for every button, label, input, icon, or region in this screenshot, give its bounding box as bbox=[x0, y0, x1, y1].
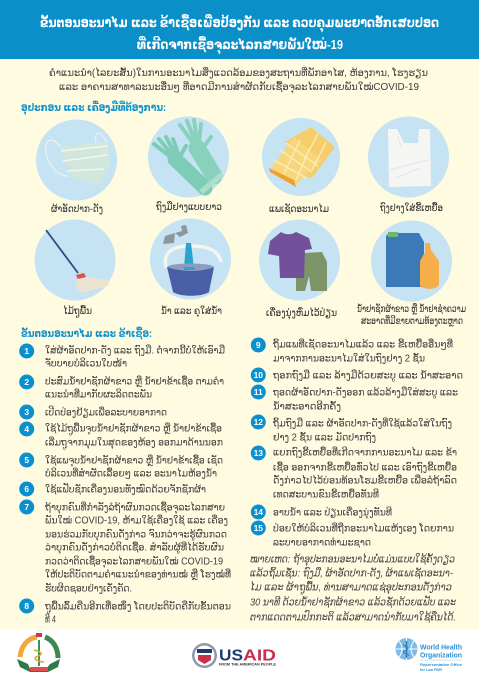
step 15 bbox=[251, 520, 454, 548]
step 8 bbox=[19, 598, 231, 626]
step 12: ຖິ້ມຖົງມື ແລະ ຜ້າອັດປາກ-ດັງທີ່ໃຊ້ແລ້ວໃສ່ໃນຖົງ bbox=[273, 416, 452, 430]
step 12: 12 bbox=[254, 417, 263, 427]
step 14: ອາບນ້ຳ ແລະ ປ່ຽນເຄື່ອງນຸ່ງທັນທີ bbox=[273, 505, 392, 520]
step 11: 11 bbox=[254, 387, 263, 397]
item: spare clothes: ເຄື່ອງນຸ່ງຫົ່ມໄວ້ປ່ຽນ bbox=[266, 307, 337, 320]
item: bleach and cleaning products bbox=[357, 220, 466, 327]
step 15: 15 bbox=[254, 523, 263, 533]
step 1: ຈັບບາຍບໍລິເວນໃບໜ້າ bbox=[45, 356, 127, 370]
step 9: ຖິ້ມແພທີ່ເຊັດອະນາໄມແລ້ວ ແລະ ຂີ້ເຫຍື້ອອື່ນໆທີ່ bbox=[273, 337, 453, 350]
step 7: ວ່າບຸກຄົນດັ່ງກ່າວບໍ່ຕິດເຊື້ອ. ສຳລັບຜູ້ທີ່ໄດ້ຮັບຜົນ bbox=[45, 540, 224, 554]
logo: World Health Organization: Representative Office bbox=[420, 663, 462, 667]
step 3: 3 bbox=[24, 407, 29, 417]
note: ໄມ ແລະ ຜ້າຖູພື້ນ, ທ່ານສາມາດແຊ່ອຸປະກອນດັ່ງກ່າວ bbox=[250, 580, 453, 594]
step 6: 6 bbox=[24, 484, 29, 494]
step 4 bbox=[19, 421, 223, 450]
step 8: ທີ 4 bbox=[45, 612, 56, 626]
item: water and bucket bbox=[150, 218, 231, 318]
step 4: ໃຊ້ໄມ້ຖູພື້ນຈຸບນ້ຳຢາຊັກຜ້າຂາວ ຫຼື ນ້ຳຢາຂ້າເຊື້ອ bbox=[45, 421, 222, 436]
logo: USAID: AID bbox=[243, 648, 276, 664]
step 13: ແຍກຖົງຂີ້ເຫຍື້ອທີ່ເກີດຈາກການອະນາໄມ ແລະ ຂ້າ bbox=[273, 445, 457, 458]
item: mop: ໄມ້ຖູພື້ນ bbox=[63, 305, 92, 318]
title banner: ທີ່ເກີດຈາກເຊື້ອຈຸລະໄລກສາຍພັນໃໝ່-19 bbox=[137, 37, 343, 54]
logo: USAID: FROM THE AMERICAN PEOPLE bbox=[219, 662, 277, 666]
step 13: ເຊື້ອ ອອກຈາກຂີ້ເຫຍື້ອທົ່ວໄປ ແລະ ເອົາຖົງຂີ້ເຫຍື້ອ bbox=[273, 460, 457, 474]
step 7 bbox=[19, 500, 231, 594]
logo: USAID bbox=[192, 643, 277, 668]
step 2: ແນະນຳທີ່ມາກັບຜະລິດຕະພັນ bbox=[45, 387, 152, 400]
step 5 bbox=[19, 452, 223, 480]
note: ໝາຍເຫດ: ຖ້າອຸປະກອນອະນາໄມບໍ່ແມ່ນແບບໃຊ້ຄັ້ງດຽວ bbox=[250, 552, 456, 566]
step 6 bbox=[19, 481, 206, 496]
note: 30 ນາທີ ດ້ວຍນ້ຳຢາຊັກຜ້າຂາວ ແລ້ວຊັກດ້ວຍແຟັບ ແລະ bbox=[250, 594, 457, 608]
intro text: ແລະ ອາຄານສາທາລະນະອື່ນໆ ທີ່ອາດມີການສຳຜັດກັບເຊື້ອຈຸລະໄລກສາຍພັນໃໝ່COVID-19 bbox=[59, 80, 419, 94]
step 1 bbox=[19, 343, 225, 370]
step 7: ກວດວ່າຕິດເຊື້ອຈຸລະໄລກສາຍພັນໃໝ່ COVID-19 bbox=[45, 554, 223, 568]
item: gloves: ຖົງມືຢາງແບບຍາວ bbox=[156, 202, 222, 213]
step 10 bbox=[251, 368, 463, 382]
step 7: ນອນຮ່ວມກັບບຸກຄົນດັ່ງກ່າວ ຈົນກວ່າຈະຮູ້ຜົນກວດ bbox=[45, 527, 227, 542]
logo: USAID: US bbox=[219, 648, 243, 664]
step 13: 13 bbox=[254, 448, 263, 458]
step 7: ຮັບຜິດຊອບຢ່າງເຄັ່ງຄັດ. bbox=[45, 581, 132, 594]
logo: World Health Organization: World Health bbox=[420, 642, 462, 652]
item: mask bbox=[36, 120, 117, 215]
heading: equipment: ອຸປະກອນ ແລະ ເຄື່ອງມືທີ່ຕ້ອງການ: bbox=[21, 100, 166, 116]
item: plastic bag bbox=[368, 116, 449, 214]
item: mop bbox=[34, 220, 116, 318]
step 13: ເທດສະບານຂົນຂີ້ເຫຍື້ອທັນທີ bbox=[273, 487, 379, 500]
step 5: 5 bbox=[24, 455, 29, 465]
step 13 bbox=[251, 445, 457, 500]
step 5: ໃຊ້ແພຈຸບນ້ຳຢາຊັກຜ້າຂາວ ຫຼື ນ້ຳຢາຂ້າເຊື້ອ ເຊັດ bbox=[45, 453, 223, 468]
step 6: ໃຊ້ແຟັບຊັກເຄື່ອງນອນທັງໝົດດ້ວຍຈັກຊັກຜ້າ bbox=[45, 481, 206, 496]
step 15: ປ່ອຍໃຫ້ບໍລິເວນທີ່ຖືກອະນາໄມແຫ້ງເອງ ໂດຍການ bbox=[273, 521, 454, 534]
item: plastic bag: ຖົງຢາງໃສ່ຂີ້ເຫຍື້ອ bbox=[380, 203, 443, 214]
step 12 bbox=[251, 414, 452, 444]
title banner bbox=[0, 0, 479, 59]
intro text bbox=[49, 66, 428, 94]
item: mask: ຜ້າອັດປາກ-ດັງ bbox=[51, 204, 103, 215]
intro text: ຄຳແນະນຳ(ໄລຍະສັ້ນ)ໃນການອະນາໄມສິ່ງແວດລ້ອມຂອງສະຖານທີ່ພັກອາໄສ, ຫ້ອງການ, ໂຮງຮຽນ bbox=[49, 66, 428, 79]
step 8: ຖູພື້ນລົ້ມຄືນອີກເທື່ອໜຶ່ງ ໂດຍປະຕິບັດຄືກັບຂັ້ນຕອນ bbox=[45, 599, 231, 613]
step 11 bbox=[251, 384, 458, 412]
step 12: ຢາງ 2 ຊັ້ນ ແລະ ມັດປາກຖົງ bbox=[273, 430, 376, 444]
logo: World Health Organization: Organization bbox=[420, 650, 462, 660]
step 3: ເປີດປ່ອງຢ້ຽມເພື່ອລະບາຍອາກາດ bbox=[45, 404, 167, 418]
item: cleaning cloth bbox=[262, 118, 340, 215]
logo: World Health Organization bbox=[396, 638, 462, 672]
step 9: ມາຈາກການອະນາໄມໃສ່ໃນຖົງຢາງ 2 ຊັ້ນ bbox=[273, 351, 425, 364]
step 8: 8 bbox=[24, 601, 29, 611]
step 10: 10 bbox=[254, 370, 263, 380]
step 11: ຖອດຜ້າອັດປາກ-ດັງອອກ ແລ້ວລ້າງມືໃສ່ສະບູ ແລະ bbox=[273, 385, 458, 398]
step 7: ໃຫ້ປະຕິບັດຕາມຄຳແນະນຳຂອງທ່ານໝໍ ຫຼື ໂຮງໝໍທີ່ bbox=[45, 567, 231, 580]
step 15: ລະບາຍອາກາດທຳມະຊາດ bbox=[273, 537, 371, 548]
step 4: ເລີ່ມຖູຈາກມຸມໃນສຸດຂອງຫ້ອງ ອອກມາດ້ານນອກ bbox=[45, 435, 223, 450]
logo: World Health Organization: for Lao PDR bbox=[420, 668, 442, 672]
note: ຕາກແດດຕາມປົກກະຕິ ແລ້ວສາມາດນຳກັບມາໃຊ້ຄືນໄດ້. bbox=[250, 609, 456, 624]
step 11: ນ້ຳສະອາດອີກຄັ້ງ bbox=[273, 399, 341, 412]
step 4: 4 bbox=[24, 424, 29, 434]
step 7: ພັນໃໝ່ COVID-19, ຫ້າມໃຊ້ເຄື່ອງໃຊ້ ແລະ ເຄື່ອງ bbox=[45, 513, 228, 526]
note: ແລ້ວຖິ້ມເຊັ່ນ: ຖົງມື, ຜ້າອັດປາກ-ດັງ, ຜ້າແພເຊັດອະນາ- bbox=[250, 566, 454, 580]
item: water and bucket: ນ້ຳ ແລະ ຄຸໃສ່ນ້ຳ bbox=[161, 306, 222, 318]
step 2: 2 bbox=[24, 377, 29, 387]
logo: Lao Ministry of Health bbox=[17, 633, 60, 672]
step 10: ຖອກຖົງມື ແລະ ລ້າງມືດ້ວຍສະບູ ແລະ ນ້ຳສະອາດ bbox=[273, 369, 463, 382]
step 2: ປະສົມນ້ຳຢາຊັກຜ້າຂາວ ຫຼື ນ້ຳຢາຂ້າເຊື້ອ ຕາມຄຳ bbox=[45, 374, 224, 388]
step 9 bbox=[251, 337, 453, 364]
step 9: 9 bbox=[256, 340, 261, 350]
step 3 bbox=[19, 404, 167, 420]
step 14 bbox=[251, 504, 392, 520]
step 1: ໃສ່ຜ້າອັດປາກ-ດັງ ແລະ ຖົງມື. ຕໍ່ຈາກນີ້ບໍ່ໃຫ້ເອົາມື bbox=[45, 343, 225, 356]
item: spare clothes bbox=[259, 220, 340, 320]
item: gloves bbox=[148, 116, 229, 213]
note bbox=[250, 552, 457, 624]
step 7: ຖ້າບຸກຄົນທີ່ກຳລັງລໍຖ້າຜົນກວດເຊື້ອຈຸລະໄລກສາຍ bbox=[45, 500, 225, 514]
step 2 bbox=[19, 374, 224, 400]
step 13: ດັ່ງກ່າວໄປໄວ້ບ່ອນທ້ອນໂຮມຂີ້ເຫຍື້ອ ເພື່ອລໍຖ້າລົດ bbox=[273, 473, 457, 486]
step 1: 1 bbox=[24, 346, 29, 356]
step 7: 7 bbox=[24, 502, 29, 512]
item: cleaning cloth: ແພເຊັດອະນາໄມ bbox=[269, 203, 329, 215]
heading: steps: ຂັ້ນຕອນອະນາໄມ ແລະ ຂ້າເຊື້ອ: bbox=[21, 326, 152, 340]
step 14: 14 bbox=[254, 507, 263, 517]
step 5: ບໍລິເວນທີ່ສຳຜັດເລື້ອຍໆ ແລະ ອະນາໄມຫ້ອງນ້ຳ bbox=[45, 466, 217, 480]
